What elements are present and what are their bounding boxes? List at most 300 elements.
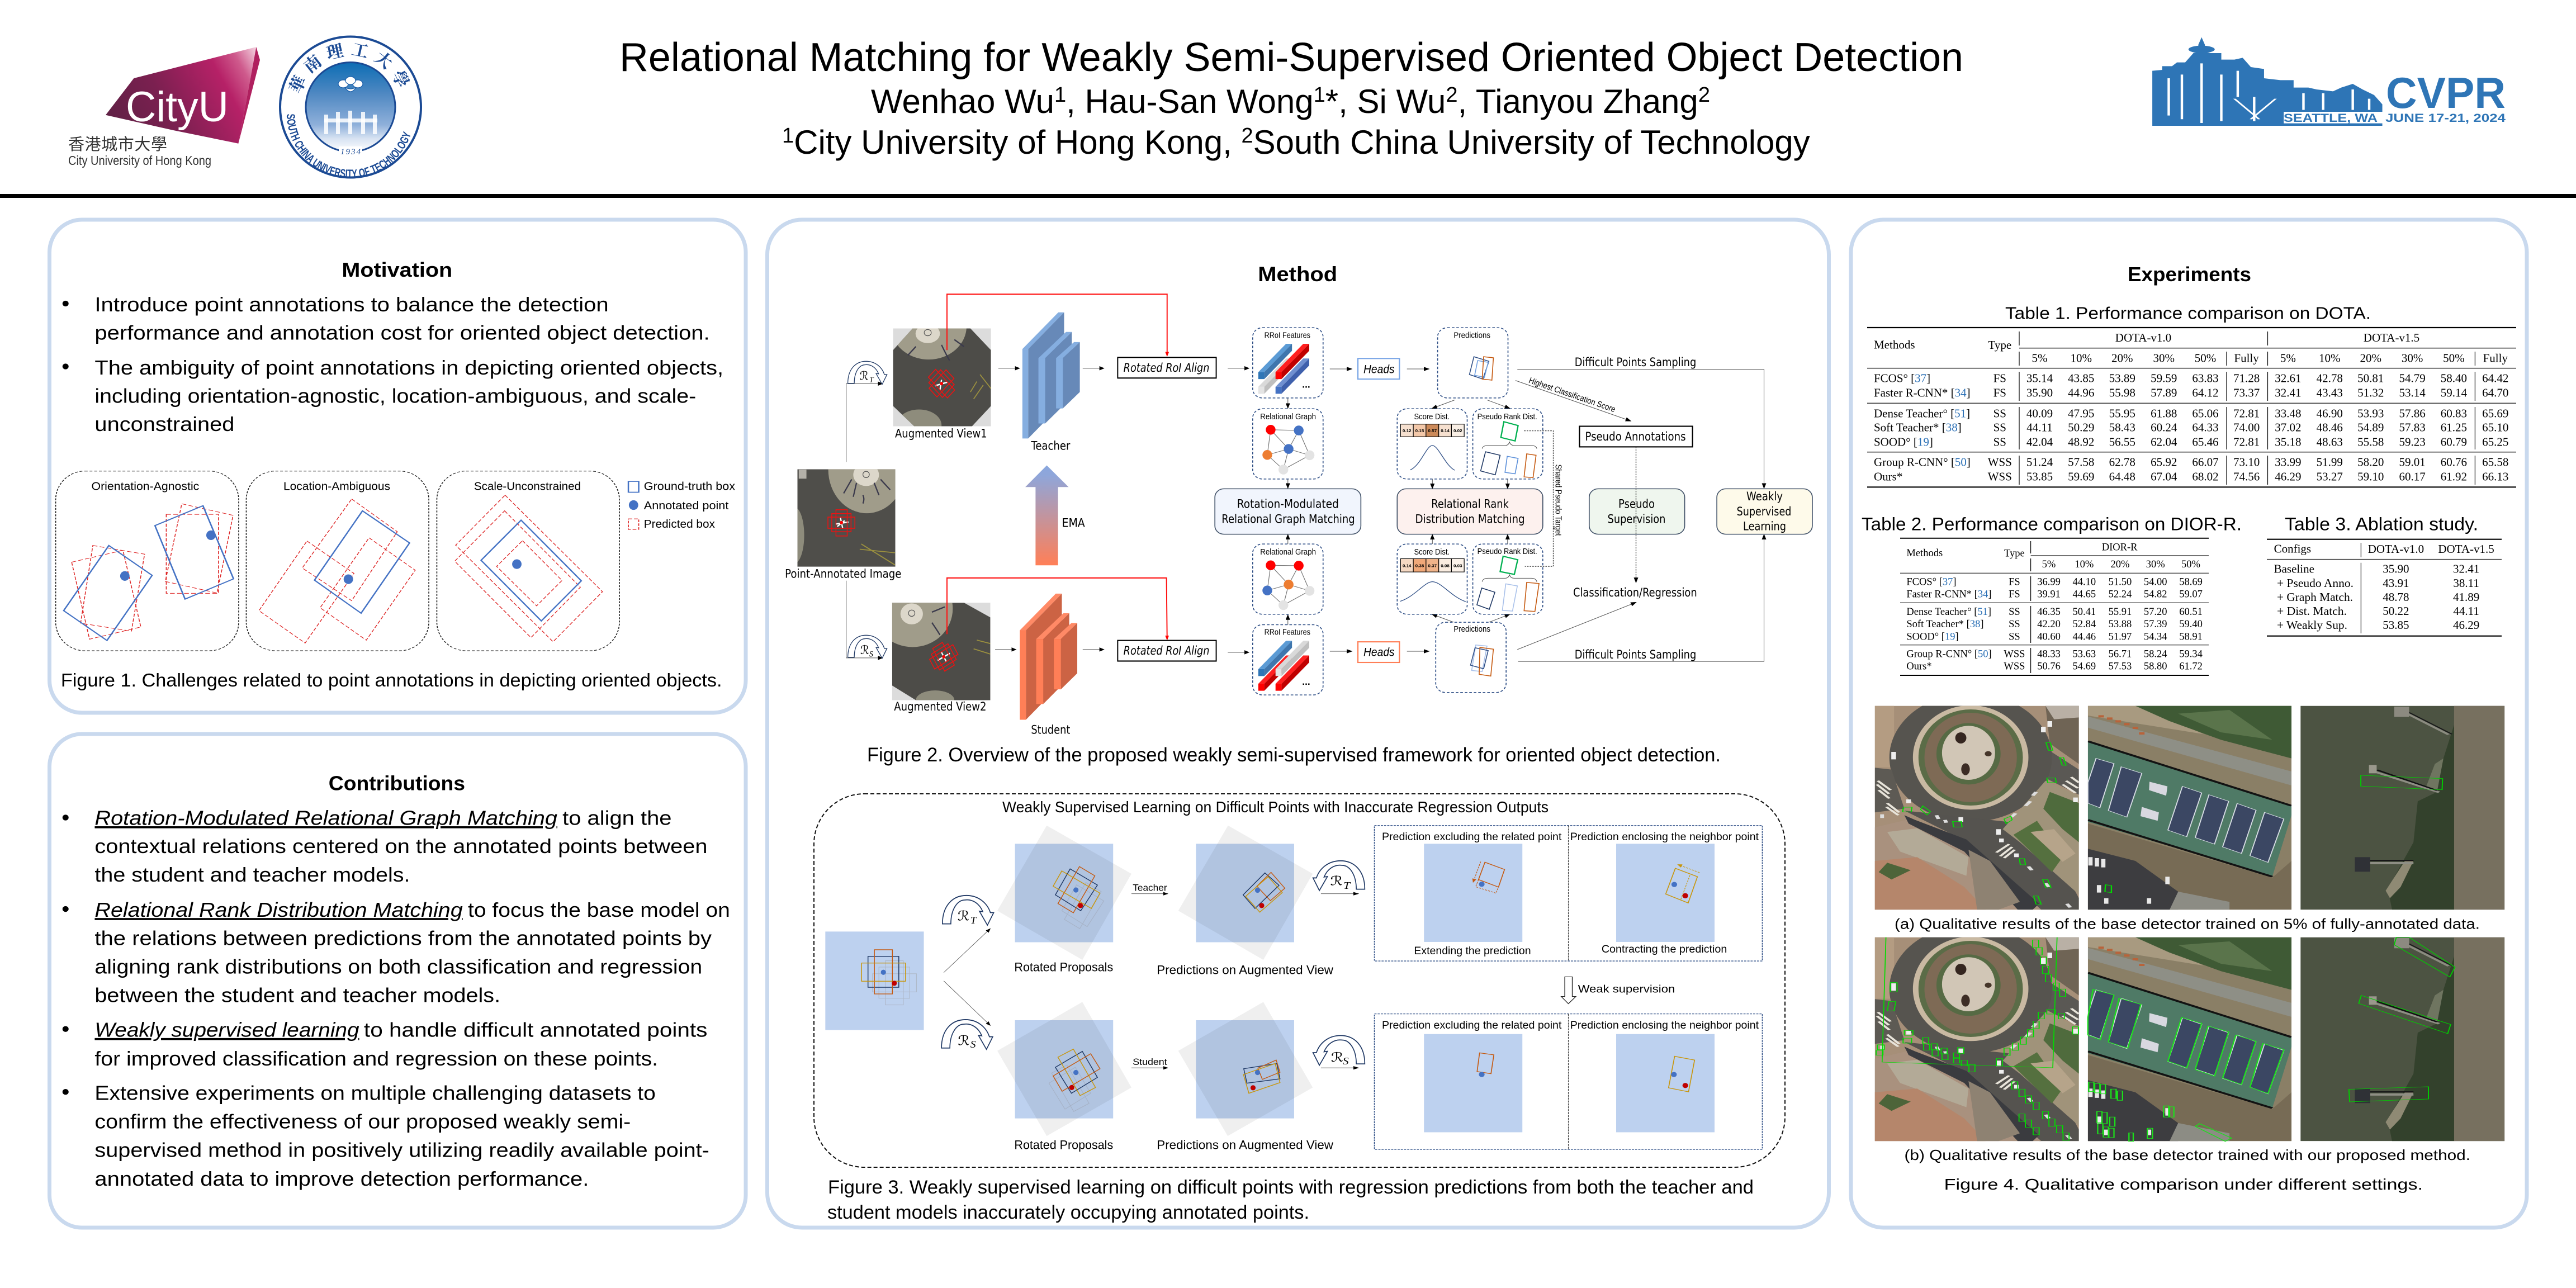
caption: figure 3: Figure 3. Weakly supervised learning on difficult points with regression predictions from both the teacher and xyxy=(828,1177,1754,1198)
arrow: student: Student xyxy=(1133,1057,1167,1067)
relational graph bottom: Relational Graph xyxy=(1260,547,1316,557)
table 1: DOTA comparison: Type xyxy=(1988,338,2011,352)
table 1: DOTA comparison: 55.58 xyxy=(2357,435,2384,448)
score distribution bottom: 0.08 xyxy=(1441,564,1450,568)
table 3: ablation study: + Pseudo Anno. xyxy=(2277,576,2354,590)
authors: 1 xyxy=(1054,83,1066,107)
table 1: DOTA comparison: 33.48 xyxy=(2275,406,2302,420)
table 1: DOTA comparison: 53.27 xyxy=(2317,470,2343,484)
student difficult-point panel xyxy=(1375,1014,1762,1149)
logo: City University of Hong Kong: 香港城市大學 xyxy=(68,135,167,154)
text block: motivation bullets: unconstrained xyxy=(94,413,234,435)
rotated proposals bottom xyxy=(997,1002,1131,1152)
table 1: DOTA comparison: 63.83 xyxy=(2192,372,2219,385)
table 2: DIOR-R comparison: 51.97 xyxy=(2109,631,2132,642)
table 1: DOTA comparison: 72.81 xyxy=(2233,406,2260,420)
table 1: DOTA comparison: 54.79 xyxy=(2399,372,2426,385)
caption: figure 4b: (b) Qualitative results of the base detector trained with our proposed method. xyxy=(1904,1147,2470,1163)
table 2: DIOR-R comparison: Group R-CNN° [50] xyxy=(1906,649,1992,660)
input proposals square xyxy=(825,931,924,1030)
table 1: DOTA comparison: 50% xyxy=(2443,351,2465,364)
table 1: DOTA comparison: 60.83 xyxy=(2441,406,2467,420)
legend: Predicted box xyxy=(644,518,715,531)
photo: tennis courts baseline detections xyxy=(2088,706,2291,910)
label: difficult points sampling top: Difficult Points Sampling xyxy=(1575,356,1696,370)
table 2: DIOR-R comparison xyxy=(1900,538,2209,675)
label: augmented view 2: Augmented View2 xyxy=(894,699,987,713)
table 3: ablation study: 35.90 xyxy=(2383,562,2409,576)
box: rotated RoI align top: Rotated RoI Align xyxy=(1124,361,1210,375)
table 1: DOTA comparison: DOTA-v1.5 xyxy=(2364,331,2419,344)
shared pseudo target connector xyxy=(1524,431,1563,566)
table 1: DOTA comparison: 64.48 xyxy=(2109,470,2135,484)
logo: City University of Hong Kong xyxy=(68,47,260,168)
table 2: DIOR-R comparison: 58.69 xyxy=(2179,577,2203,588)
table 1: DOTA comparison: 66.07 xyxy=(2192,456,2219,469)
table 1: DOTA comparison: 48.46 xyxy=(2317,421,2343,434)
table 1: DOTA comparison: 46.29 xyxy=(2275,470,2302,484)
icon: rotation R_S: ℛ xyxy=(860,643,869,657)
text block: contributions bullets: Extensive experiments on multiple challenging datasets to xyxy=(94,1082,656,1105)
table 1: DOTA comparison: 74.00 xyxy=(2233,421,2260,434)
table 1: DOTA comparison: 58.20 xyxy=(2357,456,2384,469)
box: pseudo supervision: Pseudo xyxy=(1618,498,1655,512)
pseudo rank distribution bottom xyxy=(1473,544,1543,614)
table 1: DOTA comparison: 62.78 xyxy=(2109,456,2135,469)
table 1: DOTA comparison: 46.90 xyxy=(2317,406,2343,420)
text block: contributions bullets: to handle difficult annotated points xyxy=(364,1019,707,1041)
predictions bottom xyxy=(1436,622,1506,693)
table 2: DIOR-R comparison: WSS xyxy=(2004,661,2025,673)
table 1: DOTA comparison: 48.92 xyxy=(2068,435,2094,448)
predictions bottom: Predictions xyxy=(1453,624,1490,634)
caption: figure 3: student models inaccurately occupying annotated points. xyxy=(827,1202,1309,1223)
table 1: DOTA comparison: Fully xyxy=(2483,351,2508,364)
table 2: DIOR-R comparison: WSS xyxy=(2004,649,2025,660)
affiliations: 2 xyxy=(1241,124,1253,148)
caption: figure 2: Figure 2. Overview of the proposed weakly semi-supervised framework for oriented object detection. xyxy=(867,744,1721,766)
affiliations: 1 xyxy=(782,124,794,148)
table 1: DOTA comparison: 57.58 xyxy=(2068,456,2094,469)
text block: contributions bullets: for improved classification and regression on these points. xyxy=(94,1047,658,1070)
figure 2: framework left part xyxy=(785,293,1249,737)
icon: inverse rotation R_T: T xyxy=(1343,880,1351,891)
panel: contributions xyxy=(49,734,746,1228)
table 2: DIOR-R comparison: 39.91 xyxy=(2037,589,2061,600)
table 1: DOTA comparison: 59.14 xyxy=(2441,386,2468,399)
score distribution top: 0.14 xyxy=(1441,428,1450,433)
pseudo rank distribution top: Pseudo Rank Dist. xyxy=(1478,412,1537,422)
table 2: DIOR-R comparison: 10% xyxy=(2075,559,2094,570)
table 2: DIOR-R comparison: 40.60 xyxy=(2037,631,2061,642)
table 1: DOTA comparison: 61.92 xyxy=(2441,470,2467,484)
table 1: DOTA comparison: 53.93 xyxy=(2357,406,2384,420)
box: relational rank distribution matching: Distribution Matching xyxy=(1415,513,1525,526)
table 2: DIOR-R comparison: 44.10 xyxy=(2072,577,2096,588)
text block: contributions bullets: the relations between predictions from the annotated points by xyxy=(94,927,712,949)
score distribution bottom: 0.38 xyxy=(1415,564,1424,568)
arrow: weak supervision: Weak supervision xyxy=(1578,983,1675,995)
box: weakly supervised learning: Supervised xyxy=(1737,505,1791,519)
table 2: DIOR-R comparison: 54.82 xyxy=(2144,589,2167,600)
legend: Annotated point xyxy=(644,499,729,512)
logo: CVPR 2024 Seattle: JUNE 17-21, 2024 xyxy=(2385,112,2506,125)
table 2: DIOR-R comparison: 51.50 xyxy=(2109,577,2132,588)
table 1: DOTA comparison: 30% xyxy=(2153,351,2175,364)
logo: CVPR 2024 Seattle: CVPR xyxy=(2386,68,2506,117)
predictions on augmented view bottom: Predictions on Augmented View xyxy=(1157,1138,1333,1152)
table 3: ablation study: 48.78 xyxy=(2383,590,2409,604)
icon: inverse rotation R_T xyxy=(1313,861,1365,894)
table 1: DOTA comparison: 65.25 xyxy=(2482,435,2508,448)
caption: figure 4a: (a) Qualitative results of the base detector trained on 5% of fully-annotated data. xyxy=(1895,916,2480,932)
table 1: DOTA comparison: 56.55 xyxy=(2109,435,2135,448)
shared pseudo target connector: Shared Pseudo Target xyxy=(1553,465,1563,536)
table 1: DOTA comparison: 65.46 xyxy=(2192,435,2219,448)
table 1: DOTA comparison: 50.81 xyxy=(2357,372,2384,385)
table 1: DOTA comparison: 65.92 xyxy=(2151,456,2177,469)
pseudo rank distribution top xyxy=(1473,409,1543,479)
table 2: DIOR-R comparison: 50% xyxy=(2181,559,2200,570)
table 1: DOTA comparison: 58.43 xyxy=(2109,421,2135,434)
table 2: DIOR-R comparison: Methods xyxy=(1906,548,1943,559)
table 1: DOTA comparison: 62.04 xyxy=(2151,435,2177,448)
table 1: DOTA comparison: SS xyxy=(1993,406,2006,420)
box: weakly supervised learning xyxy=(1717,489,1812,534)
photo: piers baseline detections xyxy=(2300,706,2504,910)
table 1: DOTA comparison: 59.59 xyxy=(2151,372,2177,385)
table 3: ablation study: Configs xyxy=(2274,542,2311,555)
table 2: DIOR-R comparison: 59.40 xyxy=(2179,619,2203,630)
predictions on augmented view top: Predictions on Augmented View xyxy=(1157,963,1333,977)
text block: contributions bullets: the student and teacher models. xyxy=(94,864,410,886)
table 2: DIOR-R comparison: 53.88 xyxy=(2109,619,2132,630)
table 3: ablation study: + Graph Match. xyxy=(2277,590,2353,604)
table 3: ablation study: 38.11 xyxy=(2453,576,2479,590)
teacher difficult-point panel: Prediction enclosing the neighbor point xyxy=(1570,830,1759,843)
RRoI features top: RRoI Features xyxy=(1265,331,1310,340)
table 1: DOTA comparison: 53.14 xyxy=(2399,386,2426,399)
caption: table 2: Table 2. Performance comparison on DIOR-R. xyxy=(1862,514,2242,534)
table 1: DOTA comparison: 5% xyxy=(2280,351,2296,364)
orientation-agnostic box xyxy=(56,471,239,651)
authors: 1 xyxy=(1314,83,1325,107)
table 3: ablation study: 44.11 xyxy=(2453,604,2479,618)
table 1: DOTA comparison: 35.18 xyxy=(2275,435,2302,448)
table 1: DOTA comparison: 65.10 xyxy=(2482,421,2508,434)
red feature paths xyxy=(947,294,1167,639)
table 2: DIOR-R comparison: 53.63 xyxy=(2072,649,2096,660)
table 2: DIOR-R comparison: 44.65 xyxy=(2072,589,2096,600)
table 2: DIOR-R comparison: SOOD° [19] xyxy=(1906,631,1959,642)
table 1: DOTA comparison: 20% xyxy=(2111,351,2133,364)
header xyxy=(68,35,2506,179)
authors: , Hau-San Wong xyxy=(1066,83,1314,120)
box: rotation-modulated relational graph matching: Relational Graph Matching xyxy=(1221,513,1355,526)
table 1: DOTA comparison: 64.70 xyxy=(2482,386,2508,399)
table 2: DIOR-R comparison: 46.35 xyxy=(2037,607,2061,618)
box: rotation-modulated relational graph matching: Rotation-Modulated xyxy=(1237,498,1339,512)
box: pseudo supervision xyxy=(1589,489,1685,534)
text block: motivation bullets: performance and annotation cost for oriented object detection. xyxy=(94,321,710,344)
arrow: EMA: EMA xyxy=(1062,516,1085,530)
box: heads bottom xyxy=(1358,642,1399,662)
score distribution top xyxy=(1397,409,1467,479)
figure 3: weakly supervised learning xyxy=(814,794,1785,1167)
table 1: DOTA comparison: 64.12 xyxy=(2192,386,2219,399)
table 2: DIOR-R comparison: 54.69 xyxy=(2072,661,2096,673)
table 1: DOTA comparison: 60.24 xyxy=(2151,421,2177,434)
student network xyxy=(1020,594,1077,737)
table 1: DOTA comparison: 64.42 xyxy=(2482,372,2508,385)
table 1: DOTA comparison: WSS xyxy=(1988,470,2012,484)
relational graph top xyxy=(1253,409,1323,479)
icon: rotation R_T: T xyxy=(869,375,874,385)
table 2: DIOR-R comparison: 60.51 xyxy=(2179,607,2203,618)
table 1: DOTA comparison: 53.85 xyxy=(2026,470,2053,484)
score distribution top: 0.02 xyxy=(1453,428,1462,433)
score distribution top: 0.15 xyxy=(1415,428,1424,433)
predictions on augmented view top xyxy=(1157,826,1333,977)
table 2: DIOR-R comparison: 59.07 xyxy=(2179,589,2203,600)
table 1: DOTA comparison: 43.85 xyxy=(2068,372,2094,385)
box: rotated RoI align bottom: Rotated RoI Align xyxy=(1124,643,1210,657)
table 1: DOTA comparison: 71.28 xyxy=(2233,372,2260,385)
table 1: DOTA comparison: 53.89 xyxy=(2109,372,2135,385)
table 1: DOTA comparison: 67.04 xyxy=(2151,470,2177,484)
panel: experiments xyxy=(1851,220,2527,1228)
caption: figure 4: Figure 4. Qualitative comparison under different settings. xyxy=(1944,1176,2423,1193)
table 1: DOTA comparison: 10% xyxy=(2071,351,2092,364)
score distribution bottom: 0.03 xyxy=(1453,564,1462,568)
score distribution bottom: Score Dist. xyxy=(1414,547,1450,557)
table 2: DIOR-R comparison: 57.53 xyxy=(2109,661,2132,673)
orientation-agnostic box: Orientation-Agnostic xyxy=(92,480,199,493)
box: weakly supervised learning: Learning xyxy=(1743,520,1786,534)
table 1: DOTA comparison: 55.95 xyxy=(2109,406,2135,420)
teacher difficult-point panel: Contracting the prediction xyxy=(1602,943,1727,955)
table 1: DOTA comparison: 74.56 xyxy=(2233,470,2260,484)
table 2: DIOR-R comparison: SS xyxy=(2009,631,2020,642)
score distribution top: 0.12 xyxy=(1403,428,1412,433)
table 1: DOTA comparison: Fully xyxy=(2234,351,2259,364)
teacher network: Teacher xyxy=(1030,439,1071,453)
table 1: DOTA comparison: 42.04 xyxy=(2026,435,2053,448)
rotated proposals bottom: Rotated Proposals xyxy=(1014,1138,1113,1152)
logo: South China University of Technology seal xyxy=(279,36,422,179)
table 2: DIOR-R comparison: 55.91 xyxy=(2109,607,2132,618)
table 2: DIOR-R comparison: 54.00 xyxy=(2144,577,2167,588)
table 2: DIOR-R comparison: 50.76 xyxy=(2037,661,2061,673)
table 3: ablation study: 46.29 xyxy=(2453,618,2479,632)
student difficult-point panel: Prediction excluding the related point xyxy=(1382,1019,1561,1031)
caption: figure 1: Figure 1. Challenges related to point annotations in depicting oriented objects. xyxy=(61,670,722,690)
table 2: DIOR-R comparison: FS xyxy=(2009,577,2020,588)
box: pseudo annotations xyxy=(1579,426,1693,447)
table 1: DOTA comparison: WSS xyxy=(1988,456,2012,469)
RRoI features bottom xyxy=(1253,625,1323,695)
table 1: DOTA comparison: 60.76 xyxy=(2441,456,2467,469)
table 1: DOTA comparison: FCOS° [37] xyxy=(1874,372,1930,385)
photo: roundabout baseline detections xyxy=(1875,693,2079,910)
table 1: DOTA comparison: 51.24 xyxy=(2026,456,2053,469)
rotated proposals top xyxy=(997,826,1131,974)
table 1: DOTA comparison: 65.58 xyxy=(2482,456,2508,469)
table 3: ablation study: Baseline xyxy=(2274,562,2314,576)
figure 4: qualitative results row (b) xyxy=(1875,925,2504,1142)
teacher network xyxy=(1022,312,1080,453)
text block: contributions bullets: aligning rank distributions on both classification and regression xyxy=(94,955,702,978)
logo: CVPR 2024 Seattle xyxy=(2152,37,2506,126)
teacher difficult-point panel: Extending the prediction xyxy=(1414,944,1531,957)
student difficult-point panel: Prediction enclosing the neighbor point xyxy=(1570,1019,1759,1031)
figure 4: qualitative results row (a) xyxy=(1875,693,2504,910)
table 1: DOTA comparison: 60.17 xyxy=(2399,470,2426,484)
label: difficult points sampling bottom: Difficult Points Sampling xyxy=(1575,648,1696,662)
table 3: ablation study: 32.41 xyxy=(2453,562,2479,576)
table 2: DIOR-R comparison: 58.24 xyxy=(2144,649,2167,660)
table 2: DIOR-R comparison: 61.72 xyxy=(2179,661,2203,673)
score distribution top: Score Dist. xyxy=(1414,412,1450,422)
text block: motivation bullets: Introduce point annotations to balance the detection xyxy=(94,293,609,316)
table 1: DOTA comparison: 51.32 xyxy=(2357,386,2384,399)
table 2: DIOR-R comparison: 36.99 xyxy=(2037,577,2061,588)
icon: rotation R_S xyxy=(941,1020,993,1050)
table 1: DOTA comparison: 51.99 xyxy=(2317,456,2343,469)
relational graph bottom xyxy=(1253,544,1323,614)
heading: method: Method xyxy=(1258,263,1337,286)
table 2: DIOR-R comparison: FCOS° [37] xyxy=(1906,577,1957,588)
table 1: DOTA comparison: 54.89 xyxy=(2357,421,2384,434)
table 3: ablation study xyxy=(2267,539,2502,636)
augmented view 2 xyxy=(892,603,991,700)
panel: method xyxy=(767,220,1829,1228)
score distribution bottom xyxy=(1397,544,1467,614)
RRoI features top: ... xyxy=(1302,380,1310,390)
caption: figure 3 xyxy=(827,1177,1754,1223)
predictions top: Predictions xyxy=(1453,331,1490,340)
table 3: ablation study: 53.85 xyxy=(2383,618,2409,632)
legend: Ground-truth box xyxy=(644,480,735,493)
table 1: DOTA comparison: 5% xyxy=(2032,351,2047,364)
table 3: ablation study: 41.89 xyxy=(2453,590,2479,604)
table 1: DOTA comparison: Group R-CNN° [50] xyxy=(1874,456,1971,469)
score distribution top: 0.57 xyxy=(1428,428,1437,433)
student network: Student xyxy=(1031,723,1070,737)
table 1: DOTA comparison: 33.99 xyxy=(2275,456,2302,469)
table 2: DIOR-R comparison: Type xyxy=(2004,548,2025,559)
table 1: DOTA comparison: 58.40 xyxy=(2441,372,2467,385)
dotted connector to classification/regression xyxy=(1636,447,1637,583)
table 1: DOTA comparison: SS xyxy=(1993,421,2006,434)
icon: inverse rotation R_S: ℛ xyxy=(1331,1050,1343,1065)
table 1: DOTA comparison: FS xyxy=(1993,386,2006,399)
table 1: DOTA comparison: 48.63 xyxy=(2317,435,2343,448)
RRoI features bottom: ... xyxy=(1302,677,1310,687)
box: rotation-modulated relational graph matching xyxy=(1215,489,1361,534)
label: classification/regression: Classification/Regression xyxy=(1573,586,1697,600)
augmented view 1 xyxy=(893,329,991,426)
heading: contributions: Contributions xyxy=(329,772,465,795)
table 1: DOTA comparison: Methods xyxy=(1874,338,1915,351)
text block: contributions bullets: between the student and teacher models. xyxy=(94,984,500,1006)
caption: table 1: Table 1. Performance comparison on DOTA. xyxy=(2005,304,2371,323)
box: heads bottom: Heads xyxy=(1363,645,1395,659)
table 2: DIOR-R comparison: 57.39 xyxy=(2144,619,2167,630)
table 1: DOTA comparison: 73.37 xyxy=(2233,386,2260,399)
RRoI features top xyxy=(1253,328,1323,398)
table 2: DIOR-R comparison: SS xyxy=(2009,619,2020,630)
table 2: DIOR-R comparison: 44.46 xyxy=(2072,631,2096,642)
table 2: DIOR-R comparison: 58.80 xyxy=(2144,661,2167,673)
photo: piers proposed method detections xyxy=(2300,937,2504,1141)
table 3: ablation study: 50.22 xyxy=(2383,604,2409,618)
icon: rotation R_S: ℛ xyxy=(958,1033,969,1048)
table 1: DOTA comparison: 37.02 xyxy=(2275,421,2302,434)
icon: rotation R_S: S xyxy=(970,1039,976,1050)
figure 2: framework right part xyxy=(1215,263,1812,695)
box: pseudo annotations: Pseudo Annotations xyxy=(1585,430,1686,444)
table 2: DIOR-R comparison: 52.84 xyxy=(2072,619,2096,630)
predictions on augmented view bottom xyxy=(1157,1002,1333,1152)
table 1: DOTA comparison: 30% xyxy=(2402,351,2423,364)
icon: inverse rotation R_S xyxy=(1313,1035,1365,1068)
table 1: DOTA comparison: 44.96 xyxy=(2068,386,2094,399)
text block: contributions bullets: supervised method in positively utilizing readily available point- xyxy=(94,1139,709,1162)
table 1: DOTA comparison: SOOD° [19] xyxy=(1874,435,1933,448)
table 1: DOTA comparison: 55.98 xyxy=(2109,386,2135,399)
photo: tennis courts proposed method detections xyxy=(2088,937,2291,1142)
score distribution bottom: 0.14 xyxy=(1403,564,1412,568)
table 1: DOTA comparison: 50% xyxy=(2195,351,2216,364)
logo: City University of Hong Kong: City University of Hong Kong xyxy=(68,153,211,168)
table 2: DIOR-R comparison: Soft Teacher* [38] xyxy=(1906,619,1984,630)
table 2: DIOR-R comparison: 5% xyxy=(2042,559,2056,570)
table 1: DOTA comparison: DOTA-v1.0 xyxy=(2115,331,2171,344)
affiliations: City University of Hong Kong, xyxy=(794,124,1241,161)
table 3: ablation study: + Dist. Match. xyxy=(2277,604,2347,618)
table 1: DOTA comparison: 61.25 xyxy=(2441,421,2467,434)
authors: Wenhao Wu xyxy=(871,83,1054,120)
text block: contributions bullets: Rotation-Modulated Relational Graph Matching xyxy=(94,807,557,830)
box: rotated RoI align bottom xyxy=(1117,641,1216,661)
text block: contributions bullets: annotated data to improve detection performance. xyxy=(94,1167,589,1190)
text block: motivation bullets: The ambiguity of point annotations in depicting oriented objects, xyxy=(94,356,723,379)
location-ambiguous box xyxy=(246,471,429,651)
table 2: DIOR-R comparison: 57.20 xyxy=(2144,607,2167,618)
location-ambiguous box: Location-Ambiguous xyxy=(283,480,390,493)
table 3: ablation study: + Weakly Sup. xyxy=(2277,618,2347,632)
text block: motivation bullets: including orientation-agnostic, location-ambiguous, and scale- xyxy=(94,385,696,407)
table 1: DOTA comparison: 47.95 xyxy=(2068,406,2094,420)
authors: 2 xyxy=(1446,83,1458,107)
table 2: DIOR-R comparison: Ours* xyxy=(1906,661,1932,673)
rotated proposals top: Rotated Proposals xyxy=(1014,960,1113,974)
table 1: DOTA comparison: 50.29 xyxy=(2068,421,2094,434)
table 1: DOTA comparison: 43.43 xyxy=(2317,386,2343,399)
table 1: DOTA comparison: 32.41 xyxy=(2275,386,2302,399)
table 1: DOTA comparison xyxy=(1867,328,2516,487)
table 3: ablation study: 43.91 xyxy=(2383,576,2409,590)
table 1: DOTA comparison: 66.13 xyxy=(2482,470,2508,484)
table 2: DIOR-R comparison: Faster R-CNN* [34] xyxy=(1906,589,1992,600)
table 1: DOTA comparison: 10% xyxy=(2319,351,2340,364)
point-annotated image xyxy=(797,469,896,567)
text block: contributions bullets: contextual relations centered on the annotated points between xyxy=(94,835,707,858)
pseudo rank distribution bottom: Pseudo Rank Dist. xyxy=(1478,547,1537,556)
table 1: DOTA comparison: 20% xyxy=(2360,351,2381,364)
table 1: DOTA comparison: SS xyxy=(1993,435,2006,448)
